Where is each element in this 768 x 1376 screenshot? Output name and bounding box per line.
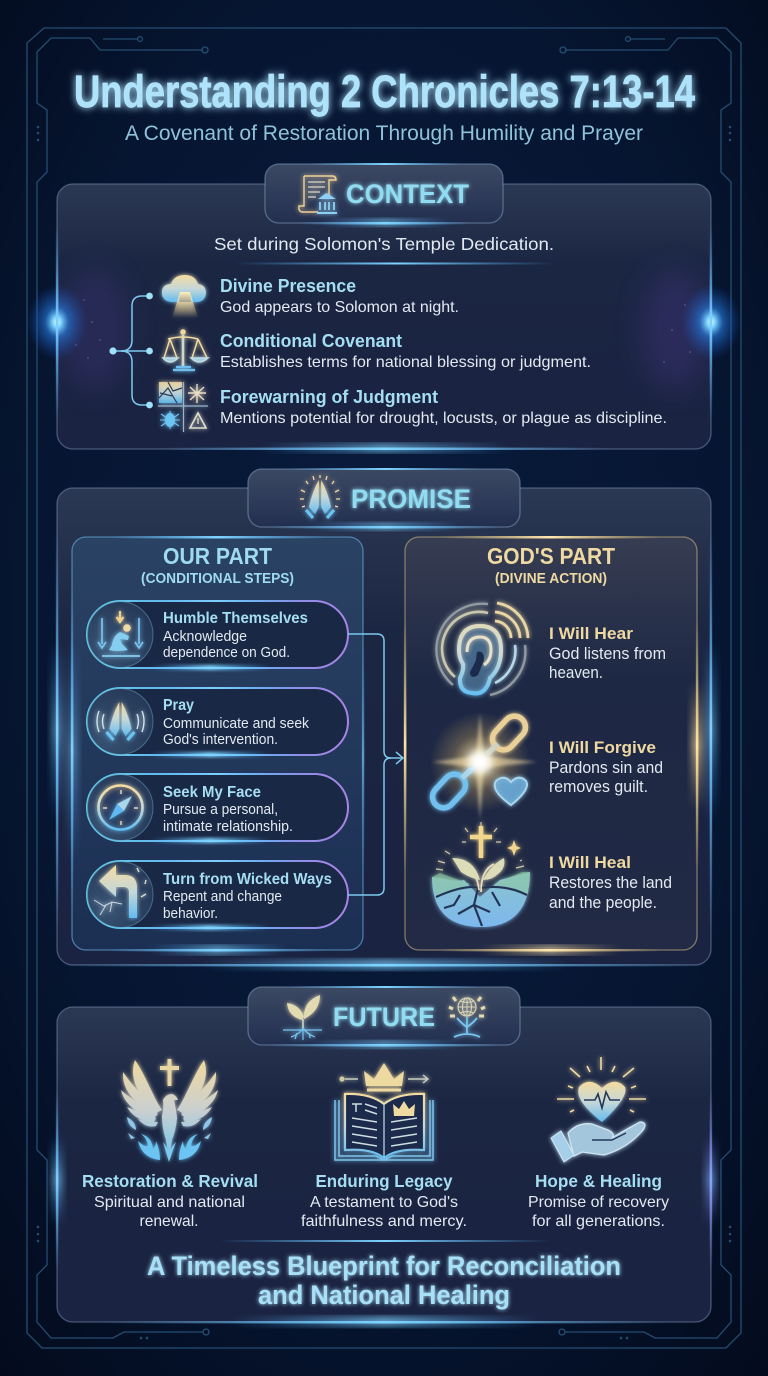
text: i will heal: [549, 853, 672, 912]
text: hope and healing: [528, 1171, 669, 1230]
icon: globe tree: [449, 997, 485, 1037]
heading: promise: PROMISE: [351, 484, 471, 514]
icon: praying hands with waves: [97, 702, 144, 740]
text: i will forgive: Pardons sin and: [549, 759, 663, 777]
icon: cloud with light: [162, 275, 206, 318]
text: divine presence: Divine Presence: [220, 276, 356, 296]
text: i will hear: [549, 624, 666, 682]
text: i will forgive: I Will Forgive: [549, 738, 656, 757]
text: hope and healing: Promise of recovery: [528, 1194, 669, 1211]
heading: our part: [141, 543, 294, 587]
text: forewarning of judgment: Forewarning of Judgment: [220, 387, 438, 407]
panel: promise: [52, 488, 716, 968]
text: conditional covenant: Conditional Covenant: [220, 331, 402, 351]
text: i will heal: Restores the land: [549, 874, 672, 892]
icon: scales: [163, 330, 208, 370]
step: pray: Pray: [163, 697, 194, 714]
text: forewarning of judgment: Mentions potential for drought, locusts, or plague as discipline.: [220, 410, 667, 427]
future tab: [248, 986, 520, 1047]
icon: ear with sound waves: [436, 603, 528, 695]
text: i will heal: I Will Heal: [549, 853, 631, 872]
step: humble themselves: dependence on God.: [163, 645, 290, 661]
nebula right: [641, 268, 709, 392]
text: restoration and revival: Spiritual and national: [94, 1194, 245, 1211]
heading: our part: (CONDITIONAL STEPS): [141, 571, 294, 587]
icon: judgment grid: [158, 382, 208, 432]
text: i will hear: I Will Hear: [549, 624, 633, 643]
icon: sprout, cross and healed land: [432, 822, 530, 927]
heading: our part: OUR PART: [163, 543, 272, 569]
icon: open book with crown: [335, 1063, 433, 1160]
text: restoration and revival: [82, 1171, 258, 1230]
text: i will forgive: [549, 738, 663, 796]
promise tab: [248, 468, 520, 529]
step: seek my face: Pursue a personal,: [163, 802, 278, 818]
text: i will forgive: removes guilt.: [549, 778, 648, 796]
step: seek my face: intimate relationship.: [163, 819, 293, 835]
context tab: [265, 163, 503, 225]
text: enduring legacy: faithfulness and mercy.: [301, 1213, 467, 1230]
text: enduring legacy: [301, 1171, 467, 1230]
step: humble themselves: [87, 600, 348, 670]
text: restoration and revival: Restoration & Revival: [82, 1171, 258, 1191]
arrow: our part to god's part: [348, 634, 403, 895]
panel: context: [27, 184, 741, 451]
text: i will heal: and the people.: [549, 894, 657, 912]
text: i will hear: heaven.: [549, 664, 603, 682]
text: hope and healing: for all generations.: [532, 1213, 665, 1230]
icon: phoenix with cross: [121, 1059, 218, 1162]
panel: our part: [67, 536, 364, 953]
icon: compass: [98, 786, 142, 830]
text: divine presence: [220, 276, 459, 316]
step: humble themselves: Humble Themselves: [163, 610, 308, 627]
panel: god's part: [404, 536, 702, 953]
text: conditional covenant: Establishes terms for national blessing or judgment.: [220, 354, 591, 371]
subtitle: A Covenant of Restoration Through Humility and Prayer: [125, 122, 643, 145]
heading: god's part: GOD'S PART: [487, 543, 615, 569]
step: turn from wicked ways: Turn from Wicked Ways: [163, 871, 332, 888]
text: forewarning of judgment: [220, 387, 667, 427]
icon: turn arrow: [94, 865, 146, 918]
step: humble themselves: Acknowledge: [163, 629, 247, 645]
step: pray: [87, 687, 348, 757]
heading: future: FUTURE: [333, 1002, 435, 1032]
heading: context: CONTEXT: [346, 179, 469, 209]
tree connector: [109, 293, 153, 408]
text: enduring legacy: Enduring Legacy: [316, 1171, 453, 1191]
text: hope and healing: Hope & Healing: [535, 1171, 662, 1191]
step: turn from wicked ways: Repent and change: [163, 889, 282, 905]
icon: kneeling figure: [98, 611, 143, 656]
heading: god's part: [487, 543, 615, 587]
icon: praying hands with rays: [300, 475, 340, 518]
icon: sprout with roots: [283, 995, 322, 1040]
closing statement: [147, 1251, 621, 1310]
context intro text: Set during Solomon's Temple Dedication.: [214, 234, 554, 254]
icon: heart in hand: [551, 1057, 646, 1162]
closing statement: A Timeless Blueprint for Reconciliation: [147, 1251, 621, 1281]
step: turn from wicked ways: behavior.: [163, 906, 218, 922]
icon: scroll and temple: [299, 176, 337, 213]
nebula left: [61, 268, 129, 392]
text: enduring legacy: A testament to God's: [310, 1194, 458, 1211]
step: turn from wicked ways: [87, 860, 348, 930]
panel: future: [52, 1007, 716, 1325]
closing statement: and National Healing: [258, 1280, 510, 1310]
step: pray: Communicate and seek: [163, 716, 310, 732]
text: restoration and revival: renewal.: [140, 1213, 198, 1230]
step: pray: God's intervention.: [163, 732, 278, 748]
text: divine presence: God appears to Solomon at night.: [220, 299, 459, 316]
text: i will hear: God listens from: [549, 645, 666, 663]
text: conditional covenant: [220, 331, 591, 371]
step: seek my face: [87, 773, 348, 843]
heading: god's part: (DIVINE ACTION): [495, 571, 607, 587]
icon: broken chain with light and heart: [428, 712, 537, 820]
step: seek my face: Seek My Face: [163, 784, 261, 801]
